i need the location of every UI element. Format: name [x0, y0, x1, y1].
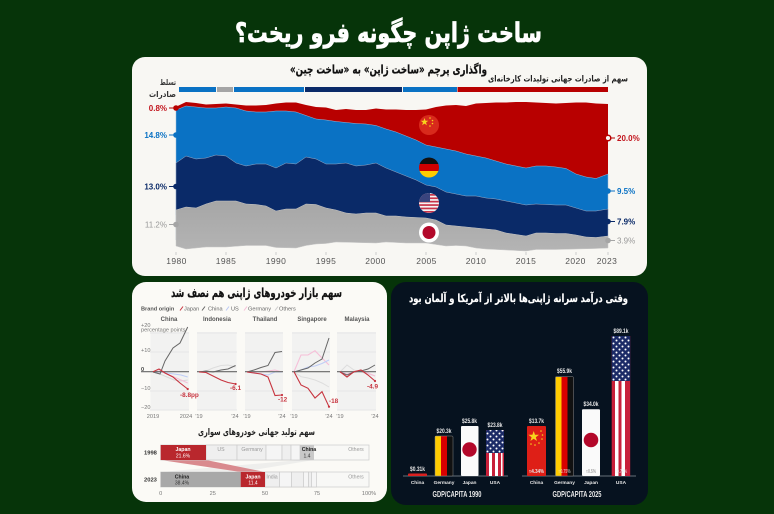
production heading: سهم تولید جهانی خودروهای سواری — [198, 427, 315, 438]
icon: China flag — [419, 115, 439, 135]
chart: Malaysia: -4.9 — [367, 384, 378, 390]
stacked bar 2023: 38.4% — [175, 480, 190, 486]
bar: China 2025: China — [530, 480, 543, 486]
stacked bar 2023: 2023 — [144, 478, 158, 484]
year axis: 2023 — [597, 256, 617, 266]
bar: Japan 1990: Japan — [463, 480, 476, 486]
percent axis: 25 — [210, 491, 216, 497]
year axis: 2000 — [365, 256, 386, 266]
percent axis: 50 — [262, 491, 268, 497]
bar: China 2025: ≈4.34% — [529, 469, 544, 475]
stacked bar 1998 — [144, 445, 369, 460]
icon: US flag — [419, 193, 439, 213]
right value markers: 9.5% — [617, 187, 635, 196]
bar: USA 2025: $89.1k — [614, 328, 629, 335]
panel heading: سهم بازار خودروهای ژاپنی هم نصف شد — [171, 285, 342, 300]
chart: China — [141, 317, 199, 399]
panel: flag handover area chart — [132, 57, 647, 276]
chart: China: -8.8pp — [180, 392, 199, 399]
y axis labels: +20 — [141, 323, 150, 329]
stacked bar 1998: 21.6% — [176, 454, 191, 460]
chart: Indonesia: Indonesia — [203, 317, 232, 323]
chart: China: China — [161, 317, 178, 323]
x axis labels: '24 — [278, 414, 286, 420]
right value markers: 7.9% — [617, 218, 635, 226]
year axis — [166, 252, 617, 266]
stacked bar 1998: 1.4 — [304, 454, 311, 460]
bar: Germany 2025: ≈0.75% — [558, 469, 571, 475]
x axis labels: '24 — [325, 414, 333, 420]
stacked bar 2023 — [144, 472, 369, 487]
legend: Brand origin — [141, 306, 175, 312]
stacked bar 1998: Germany — [241, 447, 263, 453]
year axis: 2010 — [466, 256, 486, 266]
x axis labels: '24 — [231, 414, 239, 420]
y axis labels: −20 — [141, 405, 150, 411]
year axis: 2005 — [416, 256, 437, 266]
chart subtitle: سهم از صادرات جهانی تولیدات کارخانه‌ای — [488, 74, 628, 84]
bar: Germany 1990: Germany — [434, 480, 455, 486]
left value markers: 13.0% — [144, 182, 167, 192]
year axis: 1985 — [216, 256, 236, 266]
chart: Thailand — [245, 317, 288, 404]
bar: Japan 2025: ≈0.5% — [586, 469, 596, 475]
chart: Malaysia: Malaysia — [344, 317, 370, 323]
x axis labels: '19 — [336, 414, 344, 420]
chart: Singapore — [292, 317, 339, 408]
x axis labels: '19 — [290, 414, 298, 420]
bar: China 1990: China — [411, 480, 424, 486]
chart: Singapore: -18 — [329, 398, 339, 405]
left value markers: 11.2% — [145, 220, 167, 230]
title: ساخت ژاپن چگونه فرو ریخت؟ — [235, 17, 542, 49]
stacked bar 1998: Others — [348, 447, 364, 453]
bar: Japan 1990 — [461, 418, 478, 486]
bar: Japan 2025: Japan — [584, 480, 598, 486]
axis caption 1990: GDP/CAPITA 1990 — [432, 489, 482, 499]
axis caption 2025: GDP/CAPITA 2025 — [552, 489, 602, 499]
y axis labels: +10 — [141, 348, 150, 354]
year axis: 1990 — [266, 256, 286, 266]
chart: Singapore: Singapore — [297, 317, 327, 323]
left value markers: 14.8% — [144, 131, 167, 140]
percent axis — [159, 491, 376, 497]
percent axis: 0 — [159, 491, 162, 497]
chart: Indonesia: -6.1 — [230, 385, 241, 392]
bar: USA 2025 — [612, 328, 630, 486]
bar chart: GDP per capita 2025 — [522, 328, 636, 499]
connector bands — [161, 460, 314, 472]
x axis labels: '19 — [195, 414, 203, 420]
bar: Japan 1990: $25.8k — [462, 418, 477, 425]
legend: Japan — [184, 306, 199, 312]
bar: China 2025 — [527, 418, 546, 486]
chart: Indonesia — [197, 317, 241, 392]
panel: Japanese car market share — [132, 282, 387, 502]
bar: China 1990 — [408, 466, 427, 486]
icon: Japan flag — [419, 222, 439, 242]
chart: Malaysia — [337, 317, 378, 390]
x axis labels: 2019 — [147, 414, 159, 420]
stacked bar 2023: India — [266, 474, 278, 480]
legend: Germany — [248, 306, 271, 312]
year axis: 2020 — [565, 256, 586, 266]
bar: USA 1990: $23.8k — [488, 422, 503, 429]
percent axis: 100% — [362, 491, 376, 497]
bar: Germany 2025: $55.9k — [557, 368, 572, 375]
x axis labels: 2024 — [180, 414, 192, 420]
x axis labels: '19 — [243, 414, 251, 420]
right value markers: 20.0% — [617, 134, 640, 143]
bar: USA 1990 — [486, 422, 504, 486]
icon: Germany flag — [419, 157, 439, 178]
bar: Germany 2025 — [554, 368, 575, 486]
bar: Japan 2025: $34.0k — [584, 401, 599, 408]
panel heading: وقتی درآمد سرانه ژاپنی‌ها بالاتر از آمریکا و آلمان بود — [409, 291, 628, 305]
right value markers: 3.9% — [617, 236, 635, 246]
y axis labels — [141, 323, 186, 411]
left value markers: 0.8% — [149, 104, 167, 113]
export dominance strip — [179, 87, 608, 92]
bar: USA 2025: ≈0.74% — [615, 469, 627, 475]
dominance label: تسلط — [160, 78, 176, 87]
year axis: 1995 — [316, 256, 336, 266]
bar: USA 1990: USA — [490, 480, 501, 486]
year axis: 2015 — [516, 256, 536, 266]
bar: USA 2025: USA — [616, 480, 627, 486]
stacked bar 1998: China — [302, 447, 316, 453]
stacked bar 2023: 11.4 — [248, 480, 258, 486]
stacked bar 2023: China — [175, 474, 189, 480]
stacked bar 1998: US — [217, 447, 225, 453]
panel heading: واگذاری پرچم «ساخت ژاپن» به «ساخت چین» — [290, 62, 487, 78]
small multiple column backgrounds — [150, 332, 376, 410]
x axis labels: '24 — [371, 414, 379, 420]
bar chart: GDP per capita 1990 — [403, 418, 508, 499]
chart: Thailand: -12 — [278, 396, 288, 404]
bar: Germany 2025: Germany — [554, 480, 575, 486]
y axis labels: 0 — [141, 367, 144, 373]
dominance label — [149, 78, 176, 99]
x axis labels — [147, 414, 379, 420]
chart: Thailand: Thailand — [253, 317, 278, 323]
stacked bar 1998: 1998 — [144, 450, 158, 456]
bar: Japan 2025 — [582, 401, 600, 486]
left value markers — [144, 104, 179, 230]
stacked area chart — [176, 102, 608, 251]
bar: China 1990: $0.31k — [410, 466, 425, 473]
year axis: 1980 — [166, 256, 187, 266]
legend: US — [231, 306, 239, 312]
dominance label: صادرات — [149, 90, 176, 99]
bar: Germany 1990: $20.3k — [436, 428, 452, 435]
stacked bar 2023: Japan — [246, 474, 260, 480]
y axis labels: percentage points — [141, 328, 186, 334]
stacked bar 2023: Others — [348, 474, 364, 480]
legend — [141, 306, 296, 312]
legend: China — [208, 306, 224, 312]
percent axis: 75 — [314, 491, 320, 497]
panel: GDP per capita — [391, 282, 648, 505]
legend: Others — [279, 306, 296, 312]
bar: China 2025: $13.7k — [529, 418, 544, 425]
y axis labels: −10 — [141, 386, 150, 392]
right value markers — [605, 134, 640, 246]
stacked bar 1998: Japan — [176, 447, 190, 453]
bar: Germany 1990 — [434, 428, 455, 486]
